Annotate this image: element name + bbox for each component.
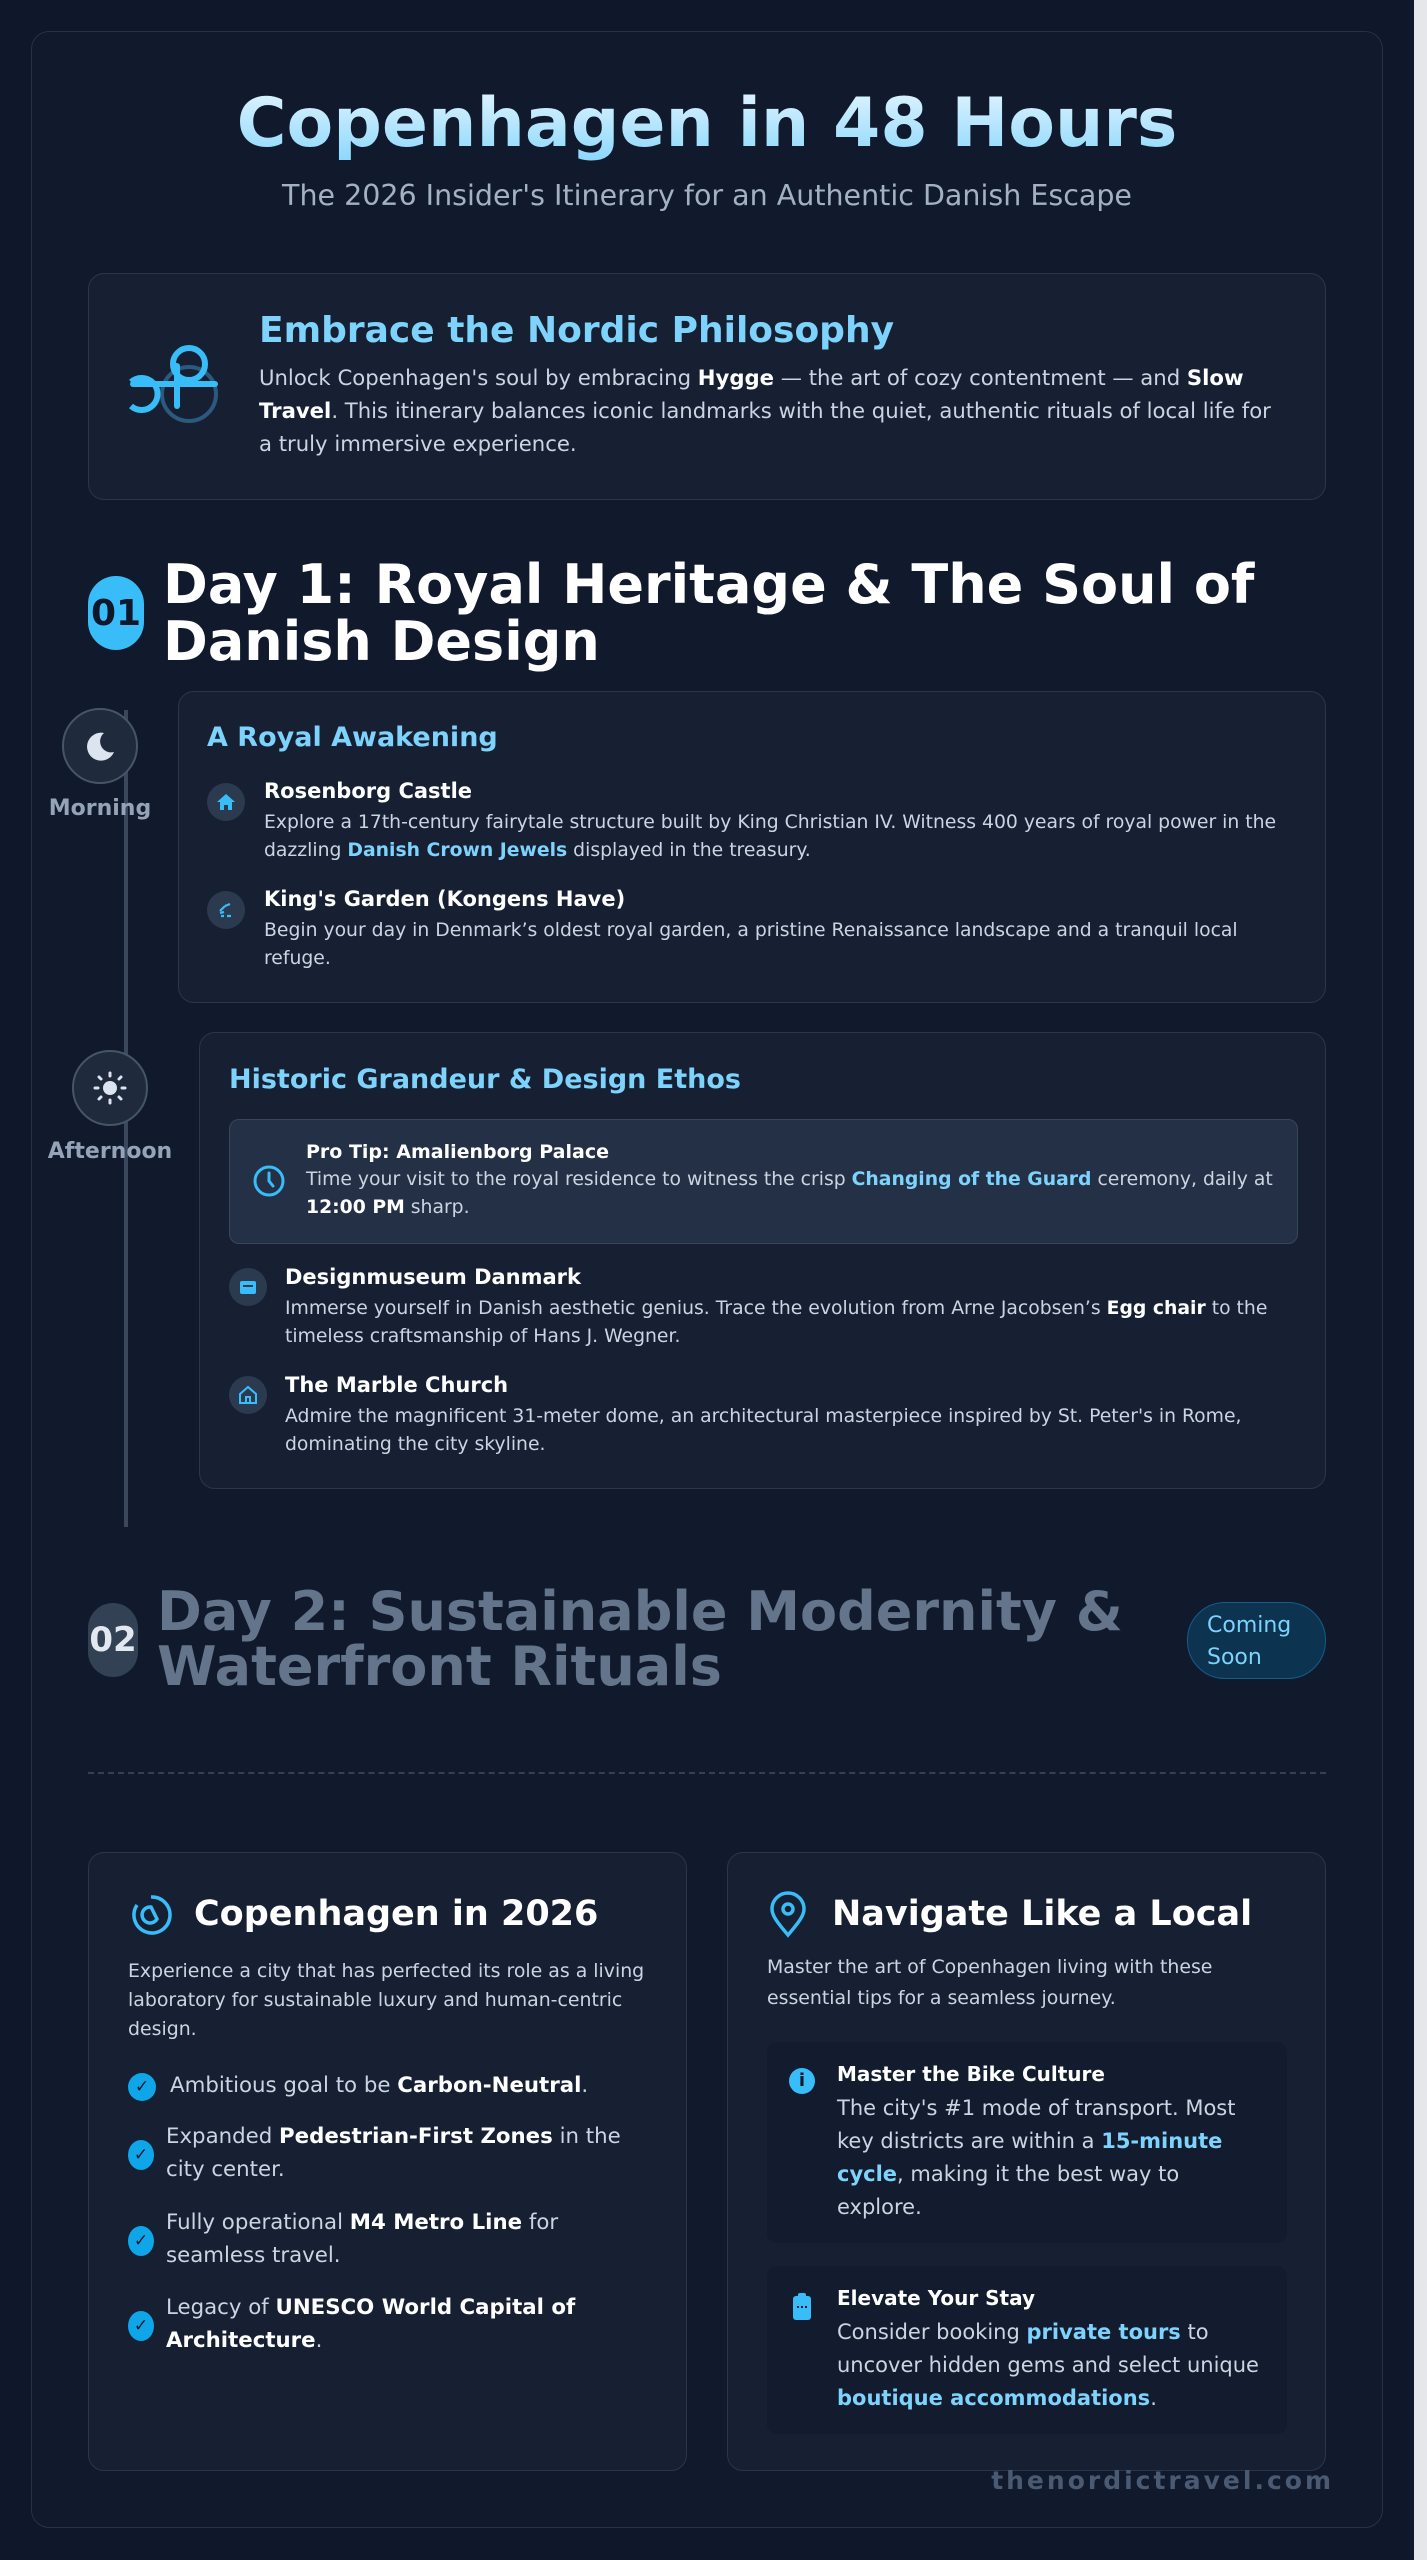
item: Rosenborg Castle: Rosenborg Castle	[264, 779, 472, 803]
badge 02	[88, 1603, 138, 1677]
panel: Copenhagen in 2026	[88, 1852, 687, 2471]
item: Rosenborg Castle	[207, 779, 1276, 861]
icon: map pin	[770, 1891, 806, 1938]
item: Designmuseum: Immerse yourself in Danish aesthetic genius. Trace the evolution from Arne Jacobsen’s Egg chair to the timeless craftsmanship of Hans J. Wegner.	[285, 1298, 1267, 1347]
icon: info	[789, 2068, 815, 2094]
tip: elevate stay: Elevate Your Stay	[837, 2286, 1035, 2310]
icon: hygge knot	[129, 345, 218, 423]
icon: info: i	[799, 2070, 805, 2091]
marker: morning: Morning	[49, 796, 151, 821]
day 1 heading	[88, 553, 1255, 673]
badge 02: 02	[89, 1620, 137, 1660]
day 2 title: Day 2: Sustainable Modernity & Waterfront Rituals	[157, 1580, 1123, 1698]
day 1 title: Day 1: Royal Heritage & The Soul of Danish Design	[163, 553, 1254, 673]
right scrollbar strip	[1414, 0, 1427, 2560]
item: King's Garden: King's Garden (Kongens Have)	[264, 887, 625, 911]
tip: bike culture: The city's #1 mode of transport. Most key districts are within a 15-minute cycle, making it the best way to explore.	[837, 2096, 1235, 2219]
tip: bike culture: Master the Bike Culture	[837, 2062, 1105, 2086]
item: King's Garden: Begin your day in Denmark’s oldest royal garden, a pristine Renaissance landscape and a tranquil local refuge.	[264, 920, 1238, 969]
heading: Historic Grandeur & Design Ethos	[229, 1064, 741, 1095]
checklist: Ambitious goal to be Carbon-Neutral.	[170, 2073, 588, 2098]
title: Copenhagen in 48 Hours	[237, 84, 1177, 163]
badge: coming soon: Soon	[1207, 1645, 1262, 1670]
icon: moon	[62, 708, 138, 784]
description	[767, 1956, 1212, 2009]
marker: afternoon: Afternoon	[48, 1139, 172, 1164]
checklist: ✓	[134, 2231, 148, 2251]
badge: coming soon	[1187, 1602, 1326, 1679]
panel: afternoon card	[199, 1032, 1326, 1489]
check item 1	[128, 2073, 588, 2101]
check item 4	[128, 2295, 576, 2353]
checklist: Fully operational M4 Metro Line for seamless travel.	[166, 2210, 558, 2268]
checklist: Legacy of UNESCO World Capital of Architecture.	[166, 2295, 575, 2353]
panel: philosophy	[88, 273, 1326, 500]
tip: elevate stay: Consider booking private tours to uncover hidden gems and select unique boutique accommodations.	[837, 2320, 1259, 2410]
description: Master the art of Copenhagen living with these	[767, 1956, 1212, 1978]
description: Experience a city that has perfected its role as a living laboratory for sustainable luxury and human-centric design.	[128, 1960, 644, 2040]
heading: Navigate Like a Local	[832, 1894, 1252, 1934]
panel: Navigate Like a Local	[727, 1852, 1326, 2471]
timeline line	[124, 710, 128, 1527]
icon: clock	[254, 1166, 284, 1196]
title	[0, 74, 1414, 174]
item: Marble Church: The Marble Church	[285, 1373, 508, 1397]
callout: pro tip: Time your visit to the royal residence to witness the crisp Changing of the Guard ceremony, daily at 12:00 PM sharp.	[306, 1169, 1273, 1218]
callout: pro tip	[229, 1119, 1298, 1244]
subtitle: The 2026 Insider's Itinerary for an Authentic Danish Escape	[282, 179, 1132, 212]
item: Designmuseum: Designmuseum Danmark	[285, 1265, 581, 1289]
callout: pro tip: Pro Tip: Amalienborg Palace	[306, 1141, 609, 1163]
tip: bike culture	[767, 2042, 1287, 2243]
watermark: thenordictravel.com	[991, 2466, 1334, 2495]
panel: morning card	[178, 691, 1326, 1003]
checklist: Expanded Pedestrian-First Zones in the city center.	[166, 2124, 621, 2182]
badge 01: 01	[91, 592, 141, 634]
body text	[259, 365, 1271, 456]
checklist: ✓	[134, 2316, 148, 2336]
tip: elevate stay	[767, 2266, 1287, 2434]
heading: Embrace the Nordic Philosophy	[259, 310, 894, 351]
checklist: ✓	[134, 2145, 148, 2165]
description: essential tips for a seamless journey.	[767, 1987, 1116, 2009]
check item 2	[128, 2124, 621, 2182]
item: King's Garden	[207, 887, 1238, 969]
heading: Copenhagen in 2026	[194, 1894, 598, 1934]
body text: a truly immersive experience.	[259, 431, 577, 456]
icon: clipboard	[793, 2293, 811, 2320]
item: Marble Church	[229, 1373, 1241, 1455]
item: Rosenborg Castle: Explore a 17th-century fairytale structure built by King Christian IV. Witness 400 years of royal power in the dazzling Danish Crown Jewels displayed in the treasury.	[264, 812, 1276, 861]
check item 3	[128, 2210, 558, 2268]
checklist	[128, 2073, 621, 2353]
badge 01	[88, 576, 144, 650]
icon: sun	[72, 1050, 148, 1126]
heading: A Royal Awakening	[207, 722, 498, 753]
badge: coming soon: Coming	[1207, 1613, 1291, 1638]
day 2 heading	[88, 1580, 1326, 1698]
marker: morning	[49, 708, 151, 821]
body text: Unlock Copenhagen's soul by embracing Hygge — the art of cozy contentment — and Slow Travel. This itinerary balances iconic landmarks with the quiet, authentic rituals of local life for	[259, 365, 1271, 423]
item: Marble Church: Admire the magnificent 31-meter dome, an architectural masterpiece inspired by St. Peter's in Rome, dominating the city skyline.	[285, 1406, 1241, 1455]
divider	[88, 1772, 1326, 1774]
marker: afternoon	[48, 1050, 172, 1164]
checklist: ✓	[135, 2077, 149, 2097]
item: Designmuseum	[229, 1265, 1267, 1347]
icon: leaf/recycle	[132, 1895, 172, 1935]
